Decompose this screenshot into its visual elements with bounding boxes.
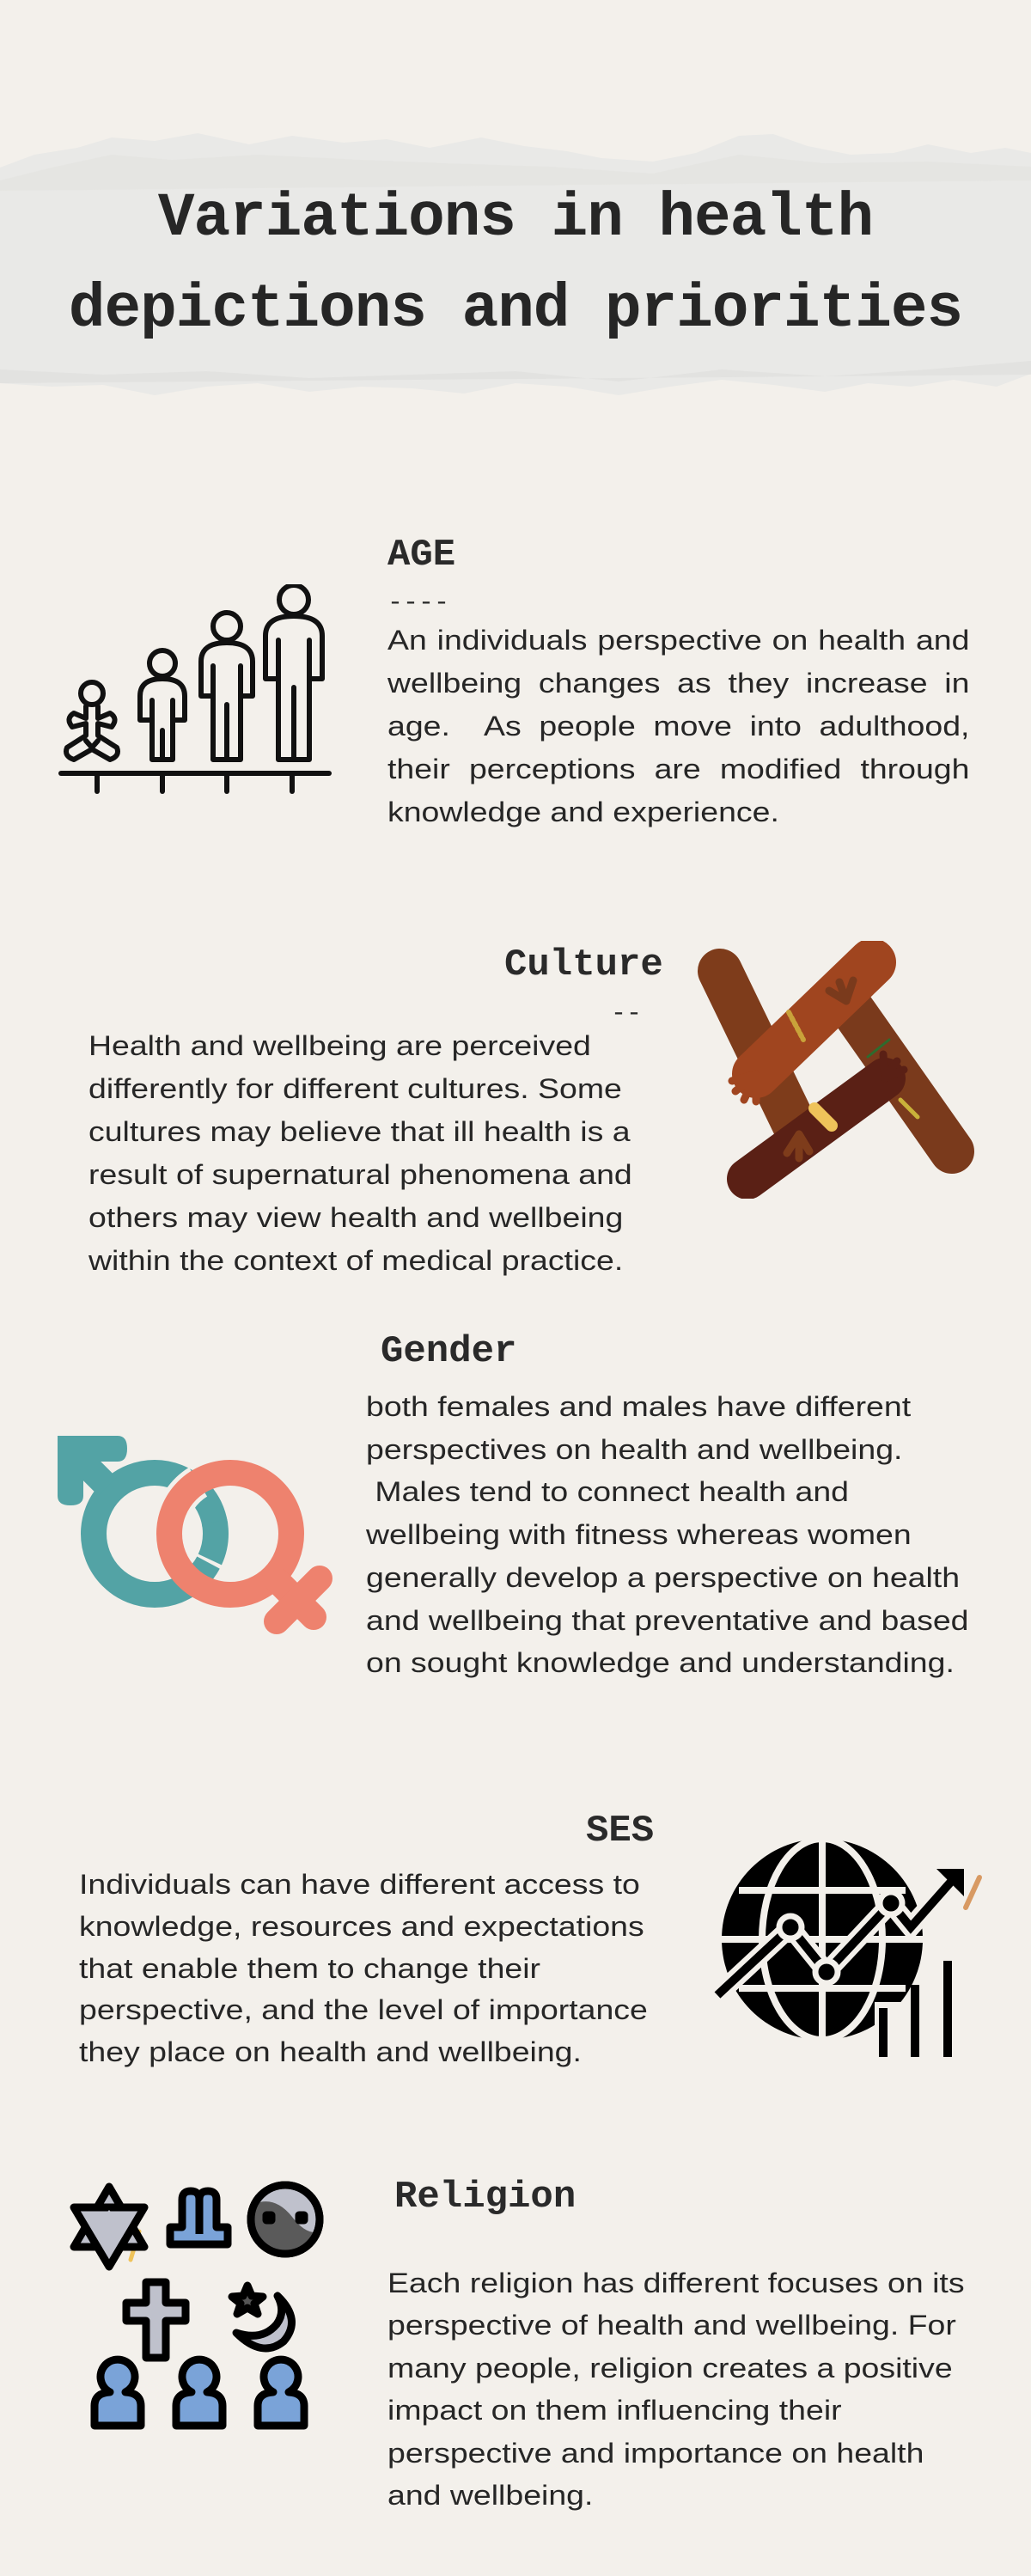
- title: depictions and priorities: [69, 276, 962, 345]
- text: religion: Each religion has different focuses on its: [387, 2268, 965, 2298]
- text: religion: perspective of health and wellbeing. For: [387, 2310, 956, 2341]
- text: age: [387, 625, 969, 827]
- text: SES: knowledge, resources and expectations: [79, 1911, 644, 1942]
- text: gender: wellbeing with fitness whereas women: [366, 1519, 912, 1550]
- icon: age progression figures: [58, 584, 332, 794]
- text: religion: perspective and importance on health: [387, 2438, 924, 2469]
- text: SES: Individuals can have different access to: [79, 1869, 640, 1900]
- title: Variations in health: [158, 185, 873, 253]
- text: religion: many people, religion creates a positive: [387, 2353, 953, 2384]
- text: age: An individuals perspective on health and: [387, 625, 969, 656]
- icon: globe with growth chart: [715, 1840, 982, 2057]
- text: culture: others may view health and wellbeing: [88, 1202, 623, 1233]
- dashes: AGE: ----: [387, 589, 449, 618]
- heading: Culture: Culture: [504, 943, 663, 986]
- text: age: age. As people move into adulthood,: [387, 711, 969, 742]
- text: SES: that enable them to change their: [79, 1952, 540, 1983]
- icon: gender symbols: [58, 1436, 332, 1634]
- title: [69, 185, 962, 345]
- text: gender: perspectives on health and wellbeing.: [366, 1434, 902, 1465]
- text: religion: impact on them influencing their: [387, 2395, 842, 2426]
- heading: Religion: Religion: [394, 2176, 576, 2219]
- text: gender: both females and males have different: [366, 1391, 911, 1422]
- text: age: wellbeing changes as they increase in: [387, 668, 969, 699]
- text: gender: [366, 1391, 968, 1678]
- text: gender: generally develop a perspective on health: [366, 1562, 960, 1593]
- icon: religious symbols and people: [70, 2181, 323, 2430]
- text: gender: Males tend to connect health and: [375, 1476, 849, 1507]
- dashes: Culture: --: [611, 999, 642, 1029]
- text: SES: they place on health and wellbeing.: [79, 2036, 582, 2067]
- heading: Gender: Gender: [381, 1330, 516, 1373]
- title banner: [0, 133, 1031, 395]
- text: religion: [387, 2268, 965, 2511]
- heading: AGE: AGE: [387, 534, 455, 577]
- text: culture: within the context of medical practice.: [88, 1245, 623, 1276]
- text: age: knowledge and experience.: [387, 797, 779, 827]
- text: culture: differently for different cultures. Some: [88, 1073, 622, 1104]
- text: religion: and wellbeing.: [387, 2480, 593, 2511]
- text: culture: cultures may believe that ill health is a: [88, 1116, 631, 1147]
- text: age: their perceptions are modified through: [387, 754, 969, 784]
- text: gender: and wellbeing that preventative and based: [366, 1605, 968, 1636]
- text: SES: [79, 1869, 648, 2067]
- text: culture: Health and wellbeing are perceived: [88, 1030, 591, 1061]
- text: culture: [88, 1030, 632, 1276]
- heading: SES: SES: [586, 1810, 654, 1853]
- text: gender: on sought knowledge and understanding.: [366, 1647, 955, 1678]
- icon: joined hands: [698, 941, 974, 1199]
- text: SES: perspective, and the level of importance: [79, 1994, 648, 2025]
- text: culture: result of supernatural phenomena and: [88, 1159, 632, 1190]
